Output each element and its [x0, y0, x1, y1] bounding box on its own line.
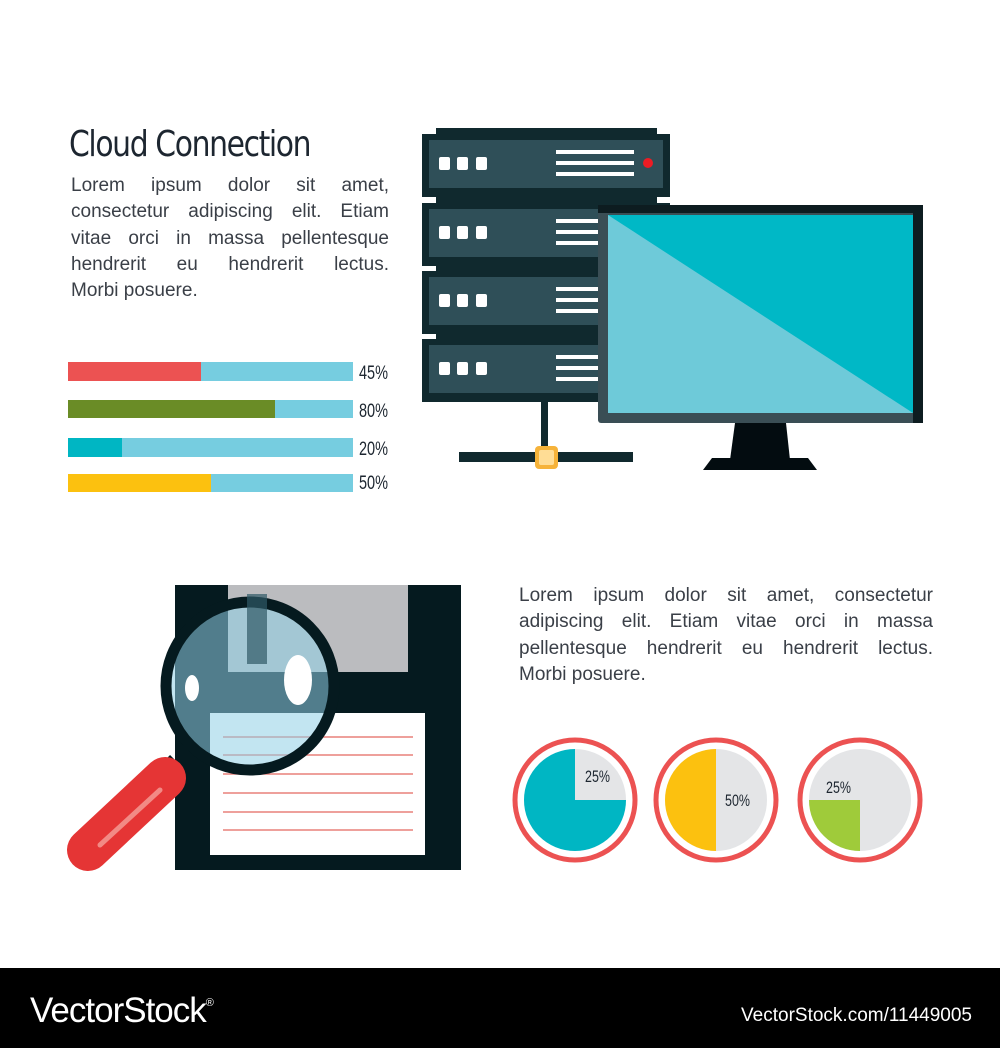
pie chart: 25% green: 25%: [826, 778, 851, 797]
icon: monitor: [598, 205, 923, 470]
text block: intro: vitae orci in massa pellentesque: [71, 228, 389, 249]
text block: intro: Lorem ipsum dolor sit amet,: [71, 175, 389, 196]
pie chart: 25%: 25%: [585, 767, 610, 786]
bar chart: 50%: [359, 473, 388, 494]
text block: intro: Morbi posuere.: [71, 280, 198, 301]
text block: second: Morbi posuere.: [519, 664, 646, 685]
pie chart: 25% green: [800, 740, 920, 860]
bar chart: 80%: [359, 401, 388, 422]
text block: second: [519, 585, 933, 685]
text block: second: Lorem ipsum dolor sit amet, consectetur: [519, 585, 933, 606]
title: Cloud Connection: [69, 124, 310, 165]
icon: server rack: [422, 128, 670, 469]
text block: intro: [71, 175, 389, 301]
footer: VectorStock: [30, 991, 206, 1030]
footer: VectorStock.com/11449005: [741, 1005, 972, 1026]
icon: floppy disk: [175, 585, 461, 870]
footer: ®: [206, 997, 214, 1009]
bar chart: [68, 362, 388, 494]
pie chart: 25%: [515, 740, 635, 860]
text block: second: adipiscing elit. Etiam vitae orci in massa: [519, 611, 933, 632]
text block: intro: hendrerit eu hendrerit lectus.: [71, 254, 389, 275]
bar chart: 45%: [359, 363, 388, 384]
text block: intro: consectetur adipiscing elit. Etiam: [71, 201, 389, 222]
icon: magnifier: [88, 594, 334, 850]
footer: [0, 968, 1000, 1048]
pie chart: 50%: 50%: [725, 791, 750, 810]
text block: second: pellentesque hendrerit eu hendrerit lectus.: [519, 638, 933, 659]
bar chart: 20%: [359, 439, 388, 460]
pie chart: 50%: [656, 740, 776, 860]
